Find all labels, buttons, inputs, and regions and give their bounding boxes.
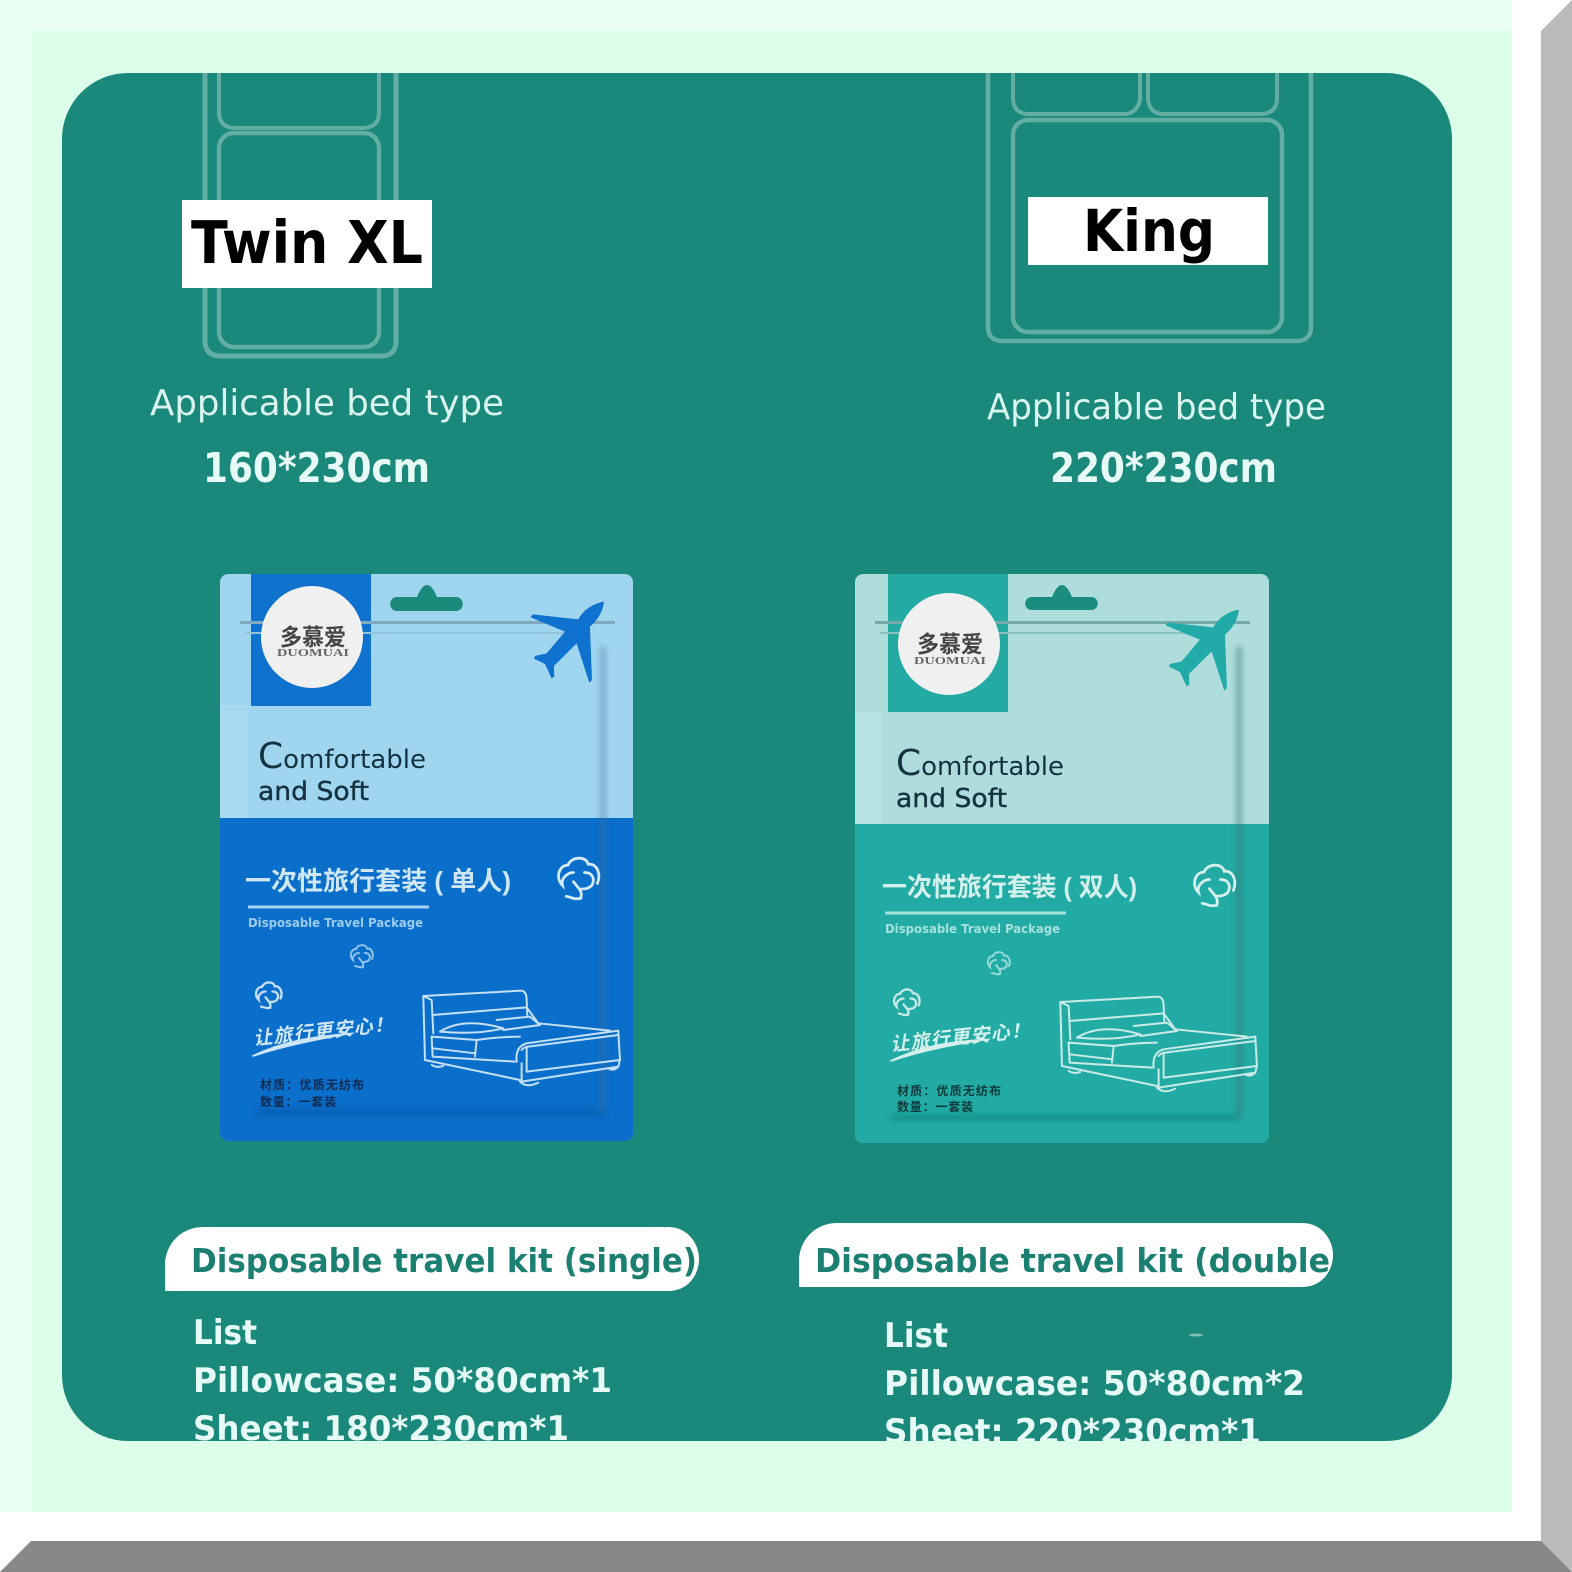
text: Chinese product name: 一次性旅行套装 ( 双人): [882, 872, 1137, 902]
icon: bed drawing: [1060, 997, 1257, 1091]
list: single kit contents: Pillowcase: 50*80cm*1: [193, 1361, 612, 1401]
lower blue band: [220, 818, 633, 1141]
label: King: [1028, 197, 1268, 265]
list: single kit contents: Sheet: 180*230cm*1: [193, 1409, 569, 1449]
label: Twin XL: Twin XL: [191, 208, 423, 277]
text: twin size: 160*230cm: [203, 444, 430, 492]
text: material and quantity: 数量：一套装: [260, 1094, 336, 1109]
text: comfortable and soft: and Soft: [258, 777, 369, 807]
text: Chinese product name: 一次性旅行套装 ( 单人): [245, 866, 511, 896]
logo square: [251, 574, 371, 706]
list: double kit contents: Pillowcase: 50*80cm*2: [884, 1364, 1305, 1404]
text: comfortable and soft: Comfortable: [258, 736, 426, 777]
icon: bed drawing: [423, 991, 620, 1085]
icon: king bed outline: [988, 60, 1311, 341]
text: king size: 220*230cm: [1050, 444, 1277, 492]
text: slogan: 让旅行更安心！: [889, 1019, 1031, 1056]
icon: twin bed outline: [205, 60, 396, 356]
heading pill: double kit: Disposable travel kit (double: [815, 1241, 1330, 1280]
text: applicable bed type, king: Applicable bed type: [987, 387, 1326, 428]
text: product subtitle: Disposable Travel Package: [248, 915, 423, 930]
text: material and quantity: [897, 1084, 1000, 1112]
label: King: King: [1083, 197, 1215, 265]
text: material and quantity: 材质：优质无纺布: [260, 1077, 364, 1092]
zip lines: [875, 621, 1250, 634]
icon: cotton large: [559, 858, 599, 899]
logo circle: DUOMUAI: [914, 656, 986, 667]
icon: plane: [531, 602, 604, 683]
logo circle: DUOMUAI: [277, 648, 349, 659]
logo square: [888, 574, 1008, 712]
text: material and quantity: 数量：一套装: [897, 1099, 973, 1114]
text: material and quantity: [260, 1077, 364, 1109]
heading pill: single kit: [165, 1227, 699, 1291]
list: single kit contents: List: [193, 1313, 257, 1353]
icon: plane: [1166, 610, 1239, 691]
logo circle: 多慕爱: [917, 631, 983, 657]
hang hole: [390, 585, 463, 611]
hang hole: [1025, 585, 1098, 610]
text: material and quantity: 材质：优质无纺布: [897, 1083, 1001, 1098]
list: single kit contents: [195, 1318, 610, 1440]
list: double kit contents: List: [884, 1316, 948, 1356]
list: double kit contents: [886, 1321, 1302, 1441]
text: comfortable and soft: [259, 742, 425, 800]
panel: teal background: [62, 73, 1452, 1441]
text: product subtitle: Disposable Travel Package: [885, 921, 1060, 936]
icon: cotton small centre: [351, 945, 373, 967]
heading pill: single kit: Disposable travel kit (single): [191, 1241, 697, 1280]
icon: cotton large: [1195, 865, 1235, 906]
heading pill: double kit: [799, 1223, 1333, 1287]
text: applicable bed type, twin: Applicable bed type: [150, 383, 504, 424]
bag seal shadow: [255, 647, 606, 1115]
logo circle: [261, 586, 363, 688]
icon: cotton small left: [894, 989, 919, 1015]
lower teal band: [855, 824, 1269, 1143]
zip lines: [240, 621, 615, 634]
list: double kit contents: Sheet: 220*230cm*1: [884, 1412, 1261, 1452]
panel: double kit package: [855, 574, 1269, 1143]
text: comfortable and soft: [897, 748, 1063, 808]
icon: cotton small left: [256, 982, 281, 1008]
icon: cotton small centre: [988, 952, 1010, 974]
text: comfortable and soft: Comfortable: [896, 743, 1064, 784]
logo circle: [898, 593, 1000, 695]
text: comfortable and soft: and Soft: [896, 784, 1007, 814]
text: slogan: 让旅行更安心！: [252, 1013, 394, 1050]
panel: single kit package: [220, 574, 633, 1141]
bag seal shadow: [890, 647, 1242, 1120]
logo circle: 多慕爱: [280, 624, 346, 650]
